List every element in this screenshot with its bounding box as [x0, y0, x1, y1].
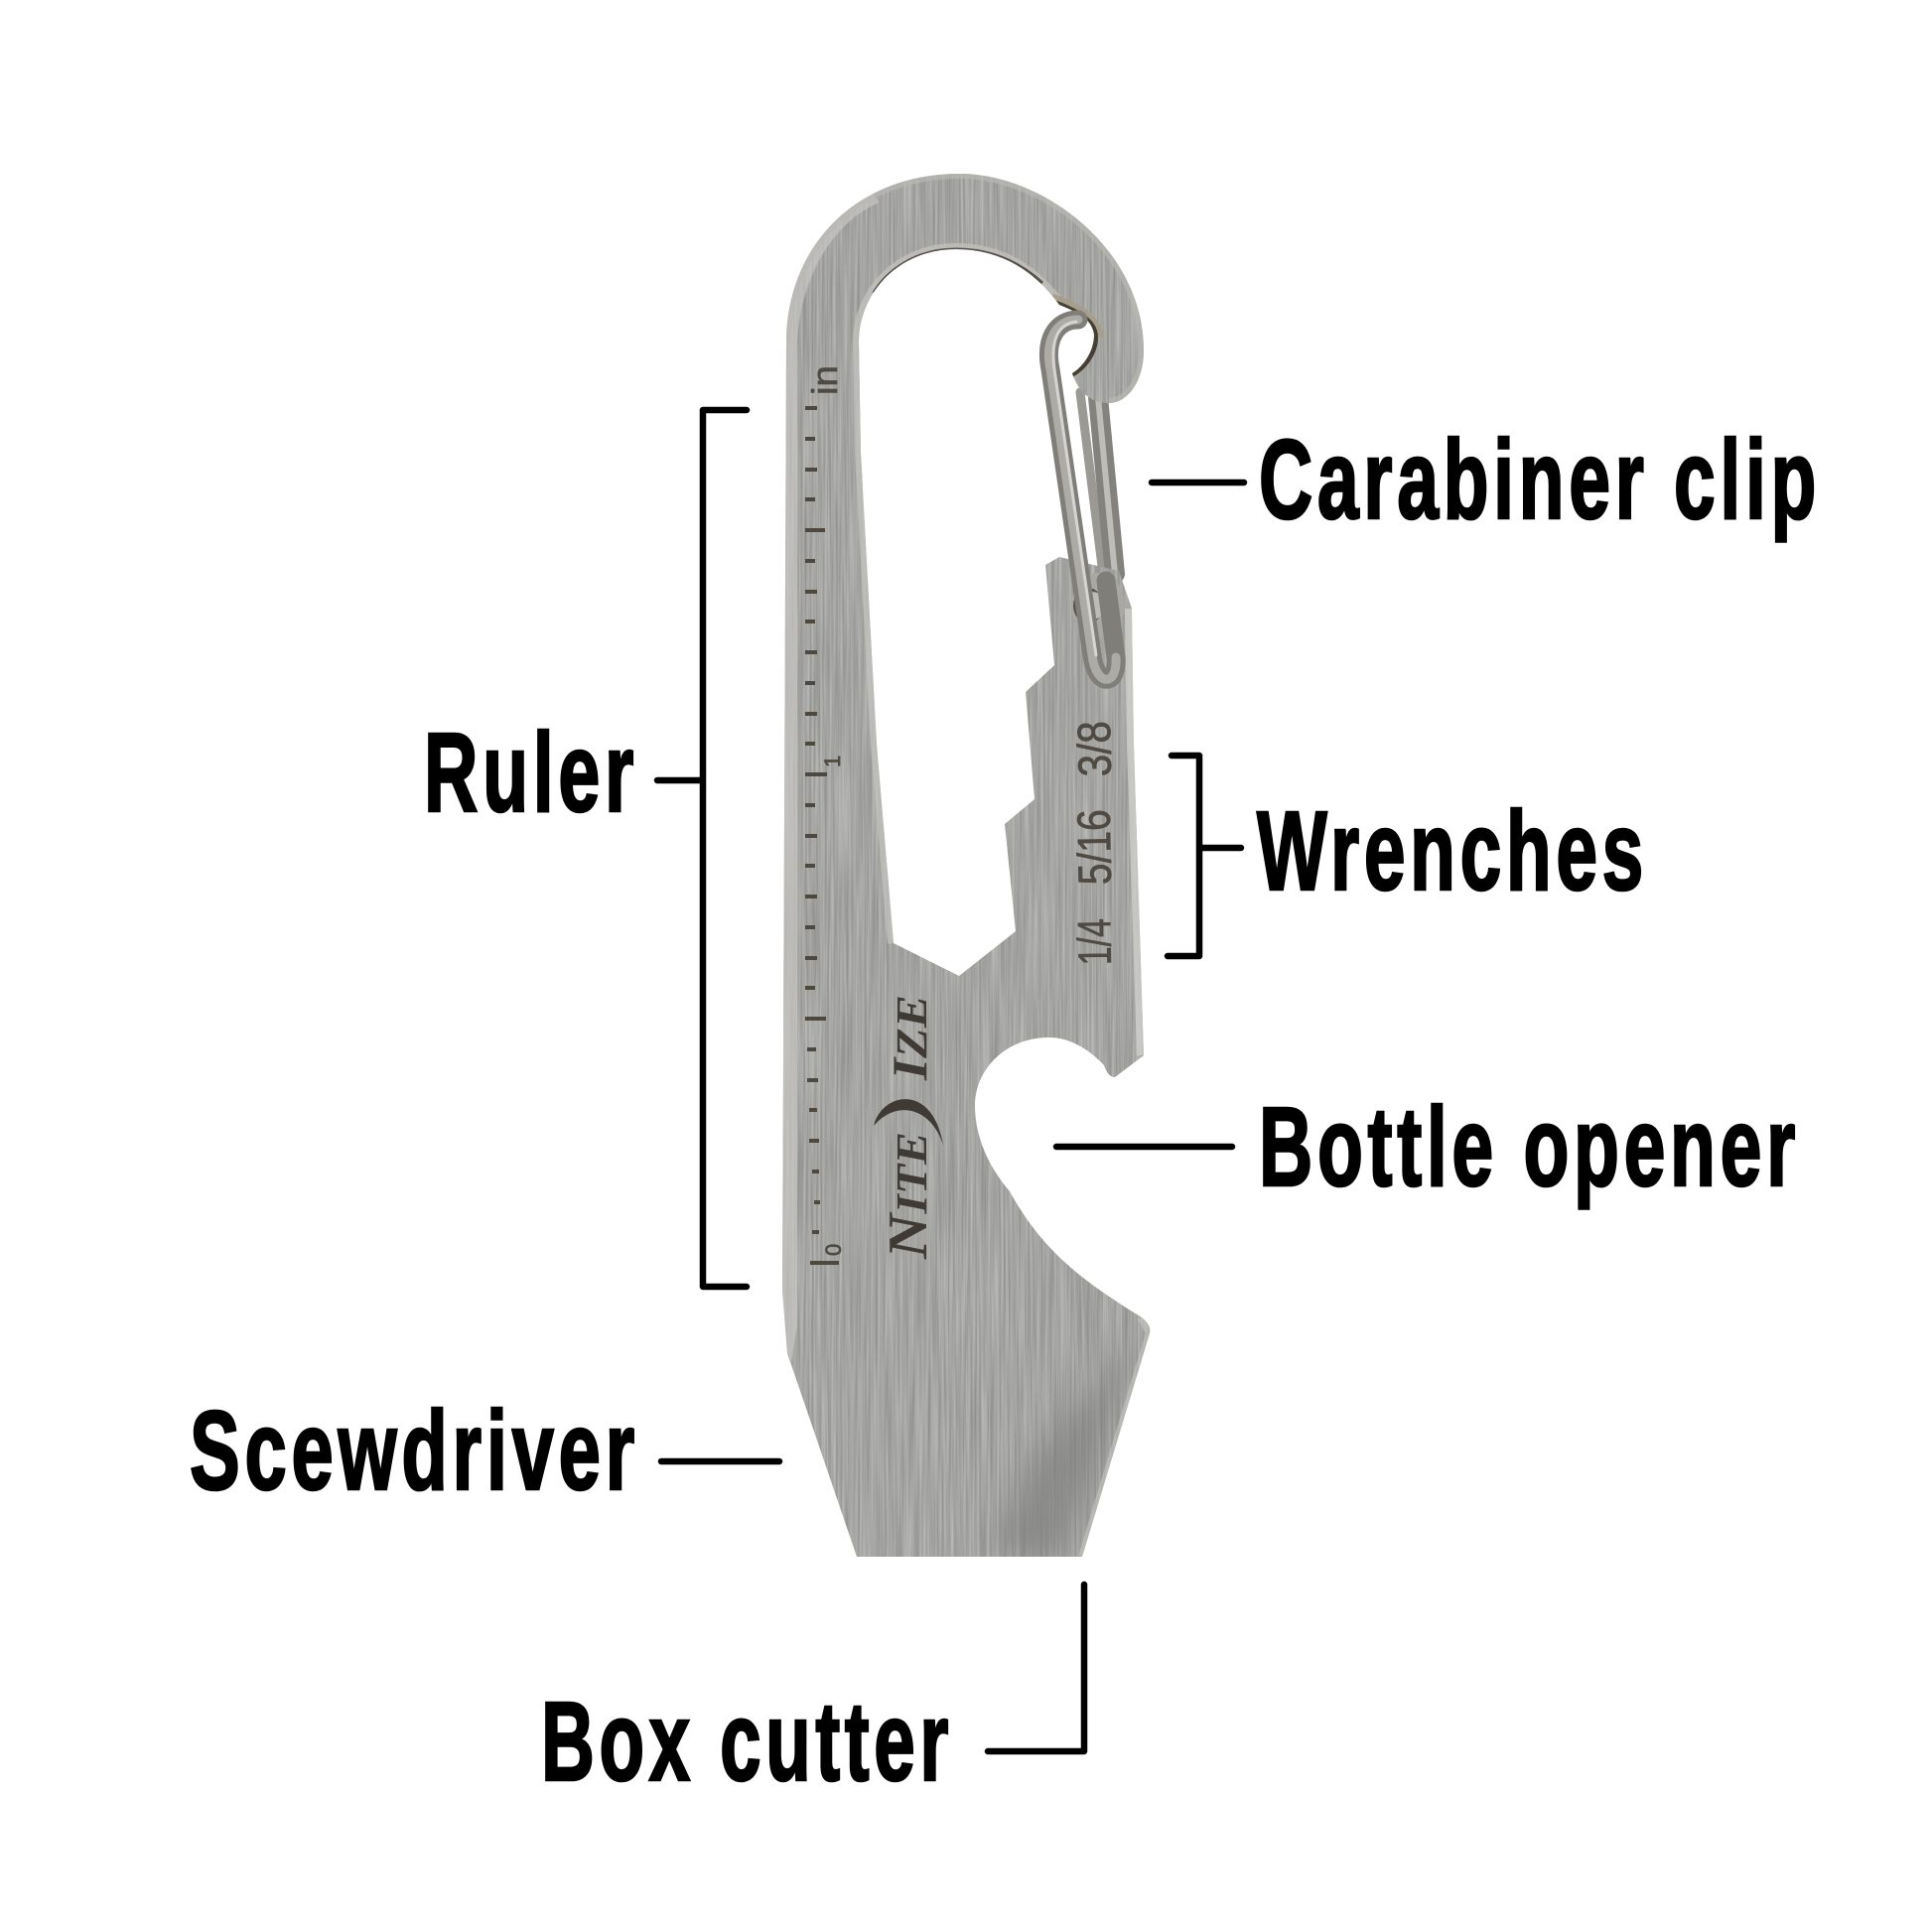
label: Box cutter — [541, 1585, 1084, 1804]
pivot boss — [1071, 573, 1125, 638]
hook rim — [786, 174, 1144, 403]
wire gate behind hook — [1080, 392, 1115, 574]
label: Wrenches — [1168, 756, 1648, 956]
ruler number 1: 1 — [820, 756, 845, 767]
brand logo — [874, 995, 943, 1260]
brand word Nite: NITE — [878, 1132, 939, 1260]
left edge bevel — [780, 194, 879, 1362]
wrench size 5/16: 5/16 — [1067, 809, 1121, 886]
wrench sizes — [1067, 721, 1121, 966]
infographic: tool anatomy diagram — [191, 174, 1815, 1783]
hook inner hole shadow — [1054, 300, 1098, 377]
blade edge — [1082, 1317, 1150, 1557]
label: Scewdriver: Scewdriver — [190, 1388, 639, 1513]
right edge bevel — [1132, 609, 1144, 1055]
tool body: stainless carabiner — [764, 159, 1162, 1569]
wire gate front loop — [1048, 320, 1116, 679]
ruler markings — [804, 365, 846, 1263]
label: Ruler: Ruler — [424, 710, 638, 835]
ruler number 0: 0 — [821, 1244, 846, 1256]
label: Wrenches: Wrenches — [1257, 788, 1648, 913]
wrench size 1/4: 1/4 — [1067, 918, 1121, 966]
blade shading — [993, 1335, 1137, 1559]
inner arch bevel — [859, 249, 1059, 943]
brand word Ize: IZE — [882, 995, 937, 1081]
label: Box cutter: Box cutter — [541, 1679, 953, 1804]
logo crescent — [874, 1099, 943, 1146]
ruler unit: in — [804, 365, 845, 395]
label: Ruler — [424, 410, 747, 1287]
wrench size 3/8: 3/8 — [1067, 721, 1121, 777]
